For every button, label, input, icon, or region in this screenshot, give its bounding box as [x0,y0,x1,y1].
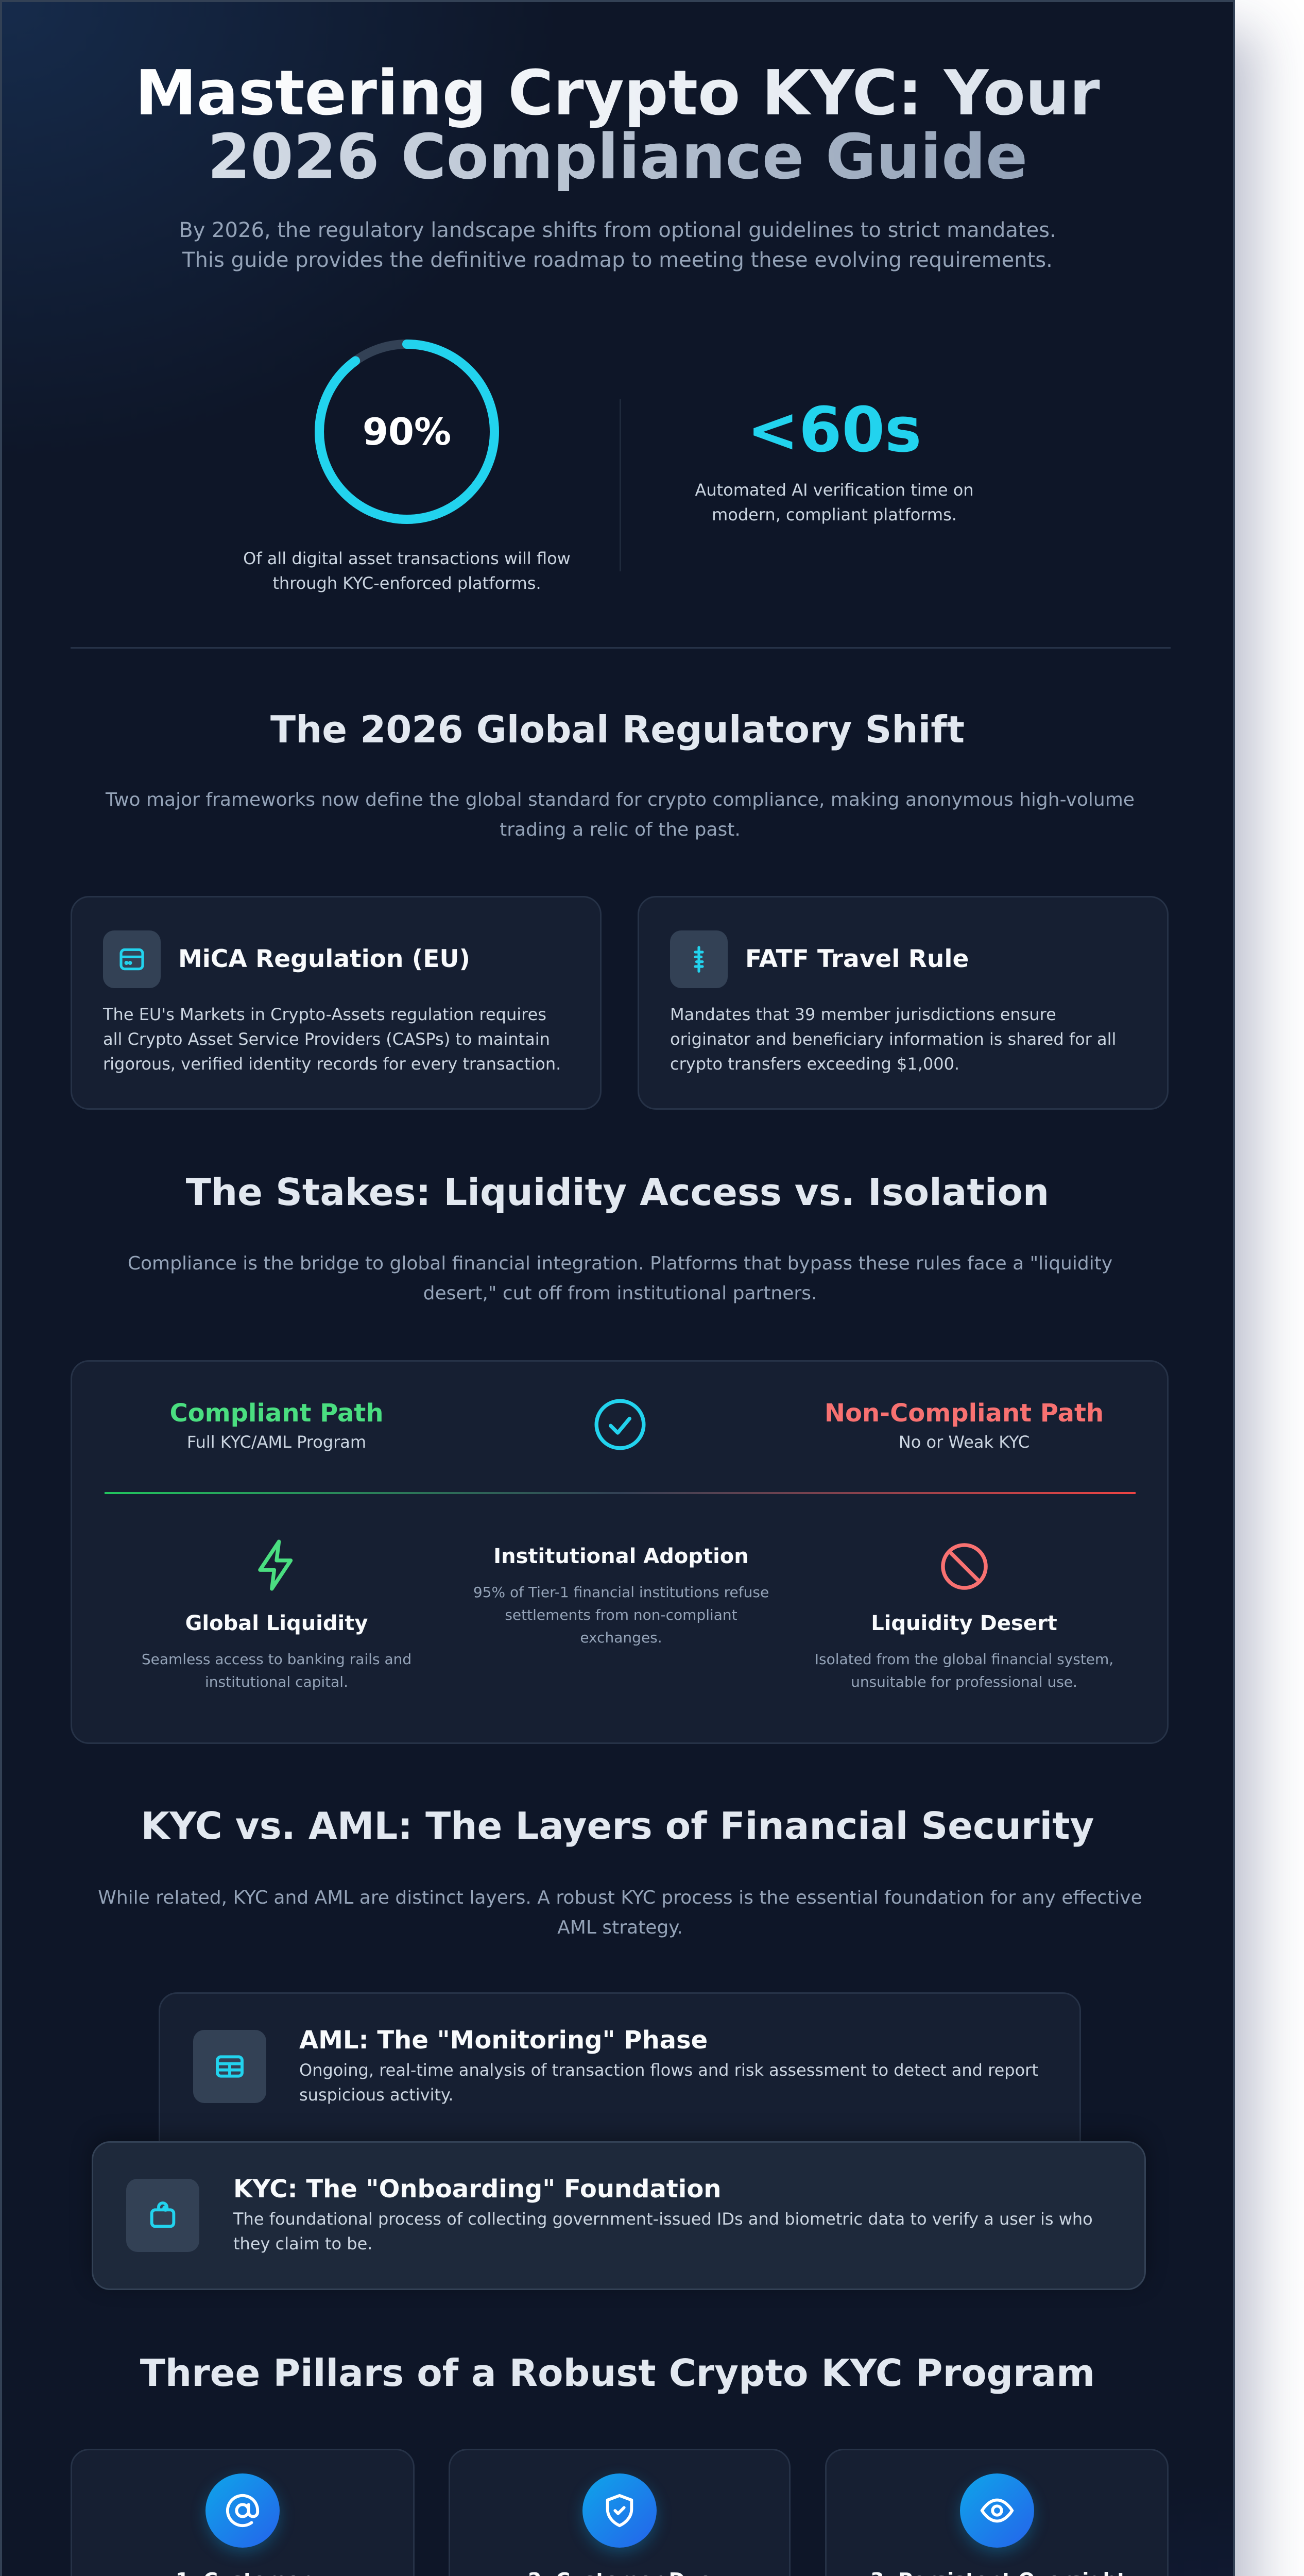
icon: check circle [594,1399,646,1450]
caption: 90% [243,549,571,593]
liquidity desert: Isolated from the global financial system, [815,1651,1113,1668]
paragraph: regulatory shift: trading a relic of the past. [500,819,741,840]
icon: travel [670,930,728,988]
global liquidity: Seamless access to banking rails and [142,1651,411,1668]
subtitle: This guide provides the definitive roadmap to meeting these evolving requirements. [182,248,1053,272]
global liquidity: Global Liquidity [185,1612,368,1635]
icon: ban [941,1543,988,1590]
caption: <60s: Automated AI verification time on [695,480,974,500]
card title: MiCA Regulation (EU) [178,945,470,973]
heading: three pillars: Three Pillars of a Robust Crypto KYC Program [140,2351,1095,2395]
icon: at [205,2473,280,2548]
icon: eye [960,2473,1034,2548]
caption: <60s: modern, compliant platforms. [712,505,957,524]
caption: 90%: Of all digital asset transactions will flow [243,549,571,568]
AML title: AML: The "Monitoring" Phase [299,2026,708,2055]
stat: donut 90% [315,340,499,524]
icon: card [103,930,161,988]
icon: table [193,2030,266,2103]
liquidity desert: Liquidity Desert [871,1612,1057,1635]
pillar 1 [71,2449,415,2576]
heading: stakes: The Stakes: Liquidity Access vs. Isolation [186,1171,1049,1214]
panel: compliance comparison [71,1360,1169,1744]
icon: lightning [258,1539,293,1591]
card title: FATF Travel Rule [745,945,969,973]
pillar 3 [825,2449,1169,2576]
institutional adoption: settlements from non-compliant [505,1606,737,1623]
compliant header [169,1399,384,1452]
stat: donut 90%: 90% [363,410,451,453]
card text: Mandates that 39 member jurisdictions ensure originator and beneficiary information is shared for all crypto transfers exceeding $1,000. [670,1005,1116,1074]
icon: wallet [126,2179,199,2252]
institutional adoption [473,1545,769,1646]
heading: KYC vs AML: KYC vs. AML: The Layers of Financial Security [141,1804,1094,1848]
panel: FATF [638,896,1169,1110]
liquidity desert: unsuitable for professional use. [851,1673,1077,1690]
paragraph: KYC vs AML: AML strategy. [557,1917,683,1938]
pillar 2 [449,2449,791,2576]
heading: regulatory shift: The 2026 Global Regulatory Shift [270,708,965,751]
title: Mastering Crypto KYC: Your [135,58,1100,129]
panel: AML layer [159,1992,1081,2178]
non-compliant header: No or Weak KYC [899,1432,1030,1452]
paragraph: regulatory shift: Two major frameworks now define the global standard for crypto compliance, making anonymous high-volume [106,789,1135,810]
paragraph: stakes [128,1253,1112,1304]
caption: <60s [695,480,974,524]
subtitle: By 2026, the regulatory landscape shifts from optional guidelines to strict mandates. [179,218,1056,242]
global liquidity: institutional capital. [205,1673,348,1690]
AML text: Ongoing, real-time analysis of transaction flows and risk assessment to detect and report suspicious activity. [299,2060,1038,2105]
liquidity desert [815,1612,1113,1690]
paragraph: stakes: Compliance is the bridge to global financial integration. Platforms that bypass these rules face a "liquidity [128,1253,1112,1274]
global liquidity [142,1612,411,1690]
card text: The EU's Markets in Crypto-Assets regulation requires all Crypto Asset Service Providers (CASPs) to maintain rigorous, verified identity records for every transaction. [103,1005,561,1074]
compliant header: Compliant Path [169,1399,384,1428]
paragraph: regulatory shift [105,789,1135,840]
institutional adoption: exchanges. [580,1629,662,1646]
paragraph: stakes: desert," cut off from institutional partners. [423,1283,817,1304]
panel: MiCA [71,896,602,1110]
subtitle [179,218,1056,272]
paragraph: KYC vs AML: While related, KYC and AML are distinct layers. A robust KYC process is the essential foundation for any effective [98,1887,1142,1908]
non-compliant header: Non-Compliant Path [825,1399,1104,1428]
KYC title: KYC: The "Onboarding" Foundation [233,2175,721,2204]
compliant header: Full KYC/AML Program [187,1432,366,1452]
icon: shield [582,2473,657,2548]
stat: <60s: <60s [747,395,921,466]
institutional adoption: Institutional Adoption [493,1545,749,1568]
title [135,58,1100,193]
non-compliant header [825,1399,1104,1452]
KYC text: The foundational process of collecting government-issued IDs and biometric data to verify a user is who they claim to be. [233,2209,1093,2253]
panel: KYC layer [92,2141,1146,2290]
paragraph: KYC vs AML [98,1887,1142,1938]
title: 2026 Compliance Guide [208,122,1027,193]
caption: 90%: through KYC-enforced platforms. [272,573,541,593]
institutional adoption: 95% of Tier-1 financial institutions refuse [473,1584,769,1601]
